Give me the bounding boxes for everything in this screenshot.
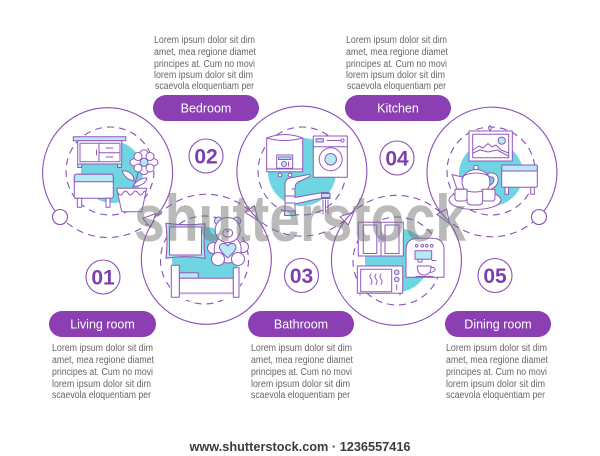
text block: bathroom: scaevola eloquentiam per — [251, 390, 351, 401]
text block: bedroom: scaevola eloquentiam per — [155, 81, 255, 92]
text block: kitchen: lorem ipsum dolor sit dim — [346, 70, 445, 81]
heading pill: Bathroom — [248, 311, 354, 337]
heading pill: Kitchen: Kitchen — [377, 102, 419, 116]
number badge 03 — [284, 258, 318, 292]
heading pill: Kitchen — [345, 95, 451, 121]
heading pill: Dining room — [445, 311, 551, 337]
text block: living room: lorem ipsum dolor sit dim — [52, 379, 151, 390]
text block: dining room: Lorem ipsum dolor sit dim — [446, 343, 547, 354]
text block: dining room: principes at. Cum no movi — [446, 367, 547, 378]
number badge 02: 02 — [194, 146, 218, 168]
text block: bedroom — [154, 35, 256, 92]
text block: kitchen — [346, 35, 448, 92]
text block: living room: amet, mea regione diamet — [52, 355, 154, 366]
icon: sideboard, ottoman and flower — [73, 137, 158, 212]
text block: kitchen: Lorem ipsum dolor sit dim — [346, 35, 447, 46]
text block: bedroom: lorem ipsum dolor sit dim — [154, 70, 253, 81]
heading pill: Bedroom: Bedroom — [181, 102, 231, 116]
text block: bathroom: principes at. Cum no movi — [251, 367, 352, 378]
text block: bathroom: Lorem ipsum dolor sit dim — [251, 343, 352, 354]
panel: kitchen circle — [331, 195, 461, 325]
footer: image URL and id: www.shutterstock.com · 1236557416 — [189, 439, 410, 454]
icon: boiler, washing machine and faucet — [267, 134, 347, 216]
panel: bathroom circle — [237, 106, 367, 236]
icon: cabinet, microwave and coffee machine — [357, 222, 444, 295]
text block: living room — [52, 343, 154, 401]
number badge 02 — [189, 139, 223, 173]
heading pill: Living room — [49, 311, 156, 337]
text block: kitchen: amet, mea regione diamet — [346, 47, 448, 58]
number badge 05 — [478, 258, 512, 292]
heading pill: Living room: Living room — [70, 318, 135, 332]
text block: bedroom: amet, mea regione diamet — [154, 47, 256, 58]
watermark: shutterstock — [134, 181, 466, 255]
heading pill: Dining room: Dining room — [464, 318, 532, 332]
icon: bed, pillow and teddy bear — [166, 217, 248, 300]
text block: bedroom: Lorem ipsum dolor sit dim — [154, 35, 255, 46]
text block: living room: principes at. Cum no movi — [52, 367, 153, 378]
text block: bathroom: lorem ipsum dolor sit dim — [251, 379, 350, 390]
number badge 04 — [380, 141, 414, 175]
text block: bathroom — [251, 343, 353, 401]
text block: dining room — [446, 343, 548, 401]
heading pill: Bedroom — [153, 95, 259, 121]
number badge 03: 03 — [290, 265, 313, 288]
number badge 05: 05 — [483, 265, 507, 288]
text block: living room: scaevola eloquentiam per — [52, 390, 152, 401]
text block: dining room: amet, mea regione diamet — [446, 355, 548, 366]
text block: living room: Lorem ipsum dolor sit dim — [52, 343, 153, 354]
text block: bathroom: amet, mea regione diamet — [251, 355, 353, 366]
heading pill: Bathroom: Bathroom — [274, 318, 328, 332]
text block: bedroom: principes at. Cum no movi — [154, 59, 255, 70]
panel: bedroom circle — [141, 194, 271, 324]
number badge 04: 04 — [385, 148, 409, 170]
text block: kitchen: scaevola eloquentiam per — [347, 81, 447, 92]
panel: living room circle — [43, 108, 173, 237]
text block: dining room: lorem ipsum dolor sit dim — [446, 379, 545, 390]
icon: picture, teapot and ottoman — [449, 126, 537, 210]
number badge 01: 01 — [91, 266, 115, 290]
panel: dining room circle — [427, 107, 557, 237]
text block: kitchen: principes at. Cum no movi — [346, 59, 447, 70]
text block: dining room: scaevola eloquentiam per — [446, 390, 546, 401]
number badge 01 — [86, 260, 120, 294]
